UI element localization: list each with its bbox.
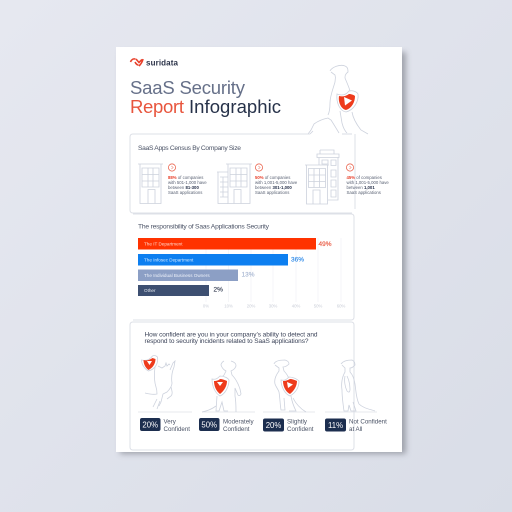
stat: 50 percent: 50% of companies <box>255 175 290 180</box>
stat: 20 percent very confident: Confident <box>164 426 190 433</box>
logo: suridata <box>130 58 179 68</box>
stat: 45 percent: 45% of companies <box>346 175 382 180</box>
stat: 50 percent <box>255 164 298 195</box>
stat: 11 percent not confident: at All <box>349 426 362 433</box>
panel heading: census: SaaS Apps Census By Company Size <box>138 145 241 152</box>
stat: 20 percent slightly confident: 20% <box>266 421 281 430</box>
illustration: meerkat with shield <box>297 65 368 134</box>
stat: 88 percent: with 501-1,000 have <box>168 180 207 185</box>
icon: small building <box>138 164 163 204</box>
stat: 20 percent slightly confident: Slightly <box>287 419 308 426</box>
meerkat: very confident <box>138 356 192 412</box>
bar chart: The Infosec Department <box>144 258 194 262</box>
bar chart: 40% <box>292 304 300 308</box>
stat: 50 percent moderately confident: Confident <box>223 426 250 433</box>
logo: suridata: suridata <box>146 58 179 68</box>
bar chart: The IT Department <box>144 242 183 246</box>
stat: 11 percent not confident: 11% <box>328 421 343 430</box>
bar chart: Other <box>144 288 156 293</box>
stat: 50 percent moderately confident <box>199 418 255 433</box>
title: Infographic <box>189 96 281 117</box>
meerkat: not confident <box>325 360 377 412</box>
question text <box>144 331 318 345</box>
stat: 88 percent <box>168 164 207 195</box>
bar chart: The Individual Business Owners <box>144 273 210 278</box>
panel: responsibility chart <box>133 214 354 320</box>
icon: two-block building <box>217 164 252 204</box>
stat: 11 percent not confident <box>325 418 387 433</box>
panel: confidence <box>130 322 387 450</box>
stat: 45 percent: between 1,001 <box>346 185 375 190</box>
bar chart: 0% <box>203 304 209 308</box>
stat: 50 percent: SaaS applications <box>255 190 289 195</box>
bar chart: 30% <box>269 304 277 308</box>
bar chart: 20% <box>247 304 255 308</box>
panel: SaaS apps census <box>130 134 389 213</box>
shield <box>337 91 358 112</box>
stat: 50 percent: with 1,001-5,000 have <box>255 180 298 185</box>
stat: 20 percent slightly confident: Confident <box>287 426 314 433</box>
stat: 20 percent very confident: Very <box>164 419 177 426</box>
stat: 50 percent: between 301-1,000 <box>255 185 292 190</box>
stat: 50 percent moderately confident: Moderately <box>223 419 255 426</box>
report page <box>116 47 406 454</box>
stat: 45 percent: SaaS applications <box>346 190 381 195</box>
stat: 20 percent very confident: 20% <box>142 420 158 430</box>
stat: 88 percent: 88% of companies <box>168 175 203 180</box>
icon: tall building <box>305 150 339 204</box>
bar chart: 36% <box>291 256 304 264</box>
bar chart: 50% <box>314 304 322 308</box>
stat: 50 percent moderately confident: 50% <box>201 420 217 430</box>
title: Report <box>130 96 184 117</box>
bar chart: 13% <box>242 272 255 278</box>
bar chart: 2% <box>214 286 223 294</box>
chart heading: The responsibility of Saas Applications Security <box>138 224 270 230</box>
meerkat: slightly confident <box>263 360 315 412</box>
bar chart: 60% <box>337 304 345 308</box>
title: SaaS Security <box>130 77 246 98</box>
bar chart: 10% <box>224 304 233 308</box>
stat: 20 percent slightly confident <box>263 418 314 433</box>
question text: respond to security incidents related to SaaS applications? <box>144 338 309 345</box>
question text: How confident are you in your company’s ability to detect and <box>144 331 318 338</box>
meerkat: moderately confident <box>202 361 255 412</box>
stat: 20 percent very confident <box>140 418 190 433</box>
bar chart <box>138 238 345 308</box>
stat: 45 percent <box>346 164 389 195</box>
stat: 88 percent: SaaS applications <box>168 190 202 195</box>
bar chart: 49% <box>318 241 332 248</box>
stat: 45 percent: with 1,001-5,000 have <box>346 180 389 185</box>
stat: 88 percent: between 81-300 <box>168 185 199 190</box>
report content <box>130 58 389 450</box>
title <box>130 77 281 117</box>
stat: 11 percent not confident: Not Confident <box>349 419 387 426</box>
